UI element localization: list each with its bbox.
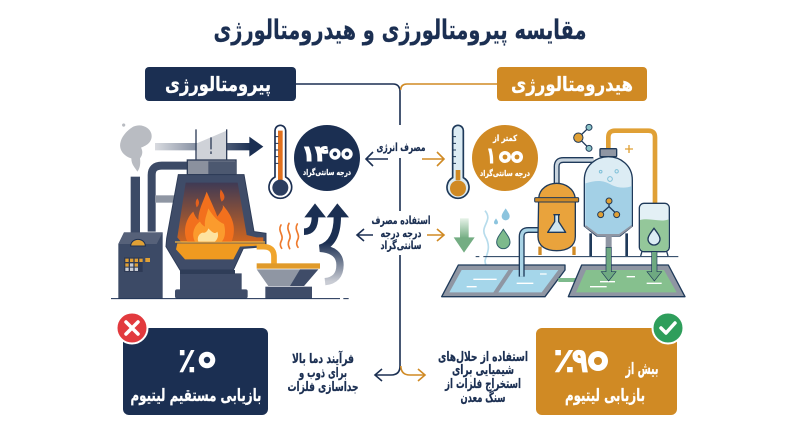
text: hydro description: استخراج فلزات از: [444, 377, 521, 392]
card: 90 percent recovery: بیش از: [625, 359, 658, 378]
arrows: green flow: [601, 247, 662, 281]
heading: pyrometallurgy: [145, 67, 296, 101]
connector lines: [296, 84, 497, 375]
card: 0 percent recovery: ۰: [203, 354, 211, 370]
temperature badge: 100: [472, 125, 538, 191]
text: hydro description: سنگ معدن: [460, 390, 506, 406]
heat waves: [280, 223, 298, 249]
label: temperature use: استفاده مصرف: [372, 214, 430, 227]
card: 90 percent recovery: [536, 312, 684, 415]
card: 0 percent recovery: [116, 312, 268, 415]
steam line: [484, 211, 490, 273]
card: 0 percent recovery: ٪: [178, 341, 196, 381]
vessel: main glass reactor: [584, 149, 632, 256]
heading: hydrometallurgy: هیدرومتالورژی: [511, 72, 633, 96]
furnace window: [177, 183, 263, 243]
illustration: furnace: [111, 123, 349, 299]
icons: drops: [494, 208, 510, 249]
illustration: hydrometallurgy plant: [442, 124, 685, 297]
arrow: green down: [454, 218, 475, 253]
card: 90 percent recovery: ۰: [594, 355, 602, 371]
ladle: [257, 263, 320, 298]
arrows: energy use: [366, 152, 444, 166]
pipe: vessel link: [557, 160, 593, 185]
text: pyro description: جداسازی فلزات: [288, 380, 358, 395]
text: pyro description: [288, 350, 358, 395]
temperature badge: 100: ۰۰: [505, 151, 517, 165]
molten spout: [257, 247, 274, 265]
temperature badge: 100: ۱: [486, 144, 496, 169]
furnace base: [175, 270, 248, 298]
text: pyro description: برای ذوب و: [298, 366, 347, 381]
temperature badge: 1400: ۰۰: [335, 149, 347, 163]
heading: pyrometallurgy: پیرومتالورژی: [165, 72, 271, 97]
text: hydro description: [438, 350, 528, 406]
icon: red cross: [116, 312, 148, 344]
card: 90 percent recovery: بازیابی لیتیوم: [565, 386, 645, 406]
pipe to furnace: [152, 166, 188, 232]
title: مقایسه پیرومتالورژی و هیدرومتالورژی: [214, 15, 586, 46]
icon: thermometer hot: [269, 125, 292, 198]
icon: flames: [185, 189, 234, 242]
vessel: orange reactor: [535, 183, 579, 255]
icon: molecule: [574, 124, 592, 151]
text: pyro description: فرآیند دما بالا: [292, 350, 354, 367]
molten bath: [176, 243, 265, 259]
temperature badge: 1400: ۱۴: [302, 142, 328, 167]
control box: [118, 232, 163, 298]
chimney: [131, 177, 140, 233]
arrows: temperature use: [357, 229, 444, 241]
ground line: [476, 255, 678, 258]
arrow: heat flow: [155, 137, 263, 157]
label: energy use: مصرف انرژی: [376, 141, 426, 154]
furnace cap: [187, 160, 236, 175]
temperature badge: 100: درجه سانتی‌گراد: [480, 168, 530, 178]
furnace body: [166, 175, 266, 270]
text: hydro description: شیمیایی برای: [452, 363, 514, 378]
icon: thermometer cool: [447, 125, 469, 198]
connector pipe: [558, 278, 577, 282]
label: temperature use: [372, 214, 430, 252]
text: hydro description: استفاده از حلال‌های: [438, 350, 528, 365]
pipe: orange: [608, 131, 655, 203]
label: temperature use: سانتی‌گراد: [380, 239, 422, 252]
arrows: rising heat: [304, 203, 349, 282]
tank: blue basin: [442, 265, 565, 297]
ground line: [111, 297, 349, 300]
card: 90 percent recovery: ٪: [553, 341, 575, 381]
pipe: water feed: [522, 230, 538, 277]
temperature badge: 1400: [294, 125, 360, 191]
vessel: green tank: [639, 203, 669, 256]
icon: plus: [625, 145, 633, 153]
icon: smoke cloud: [120, 123, 152, 172]
card: 90 percent recovery: ۹: [572, 341, 588, 381]
heading: hydrometallurgy: [497, 67, 647, 101]
card: 0 percent recovery: بازیابی مستقیم لیتیوم: [130, 386, 262, 406]
temperature badge: 100: کمتر از: [492, 134, 517, 144]
label: temperature use: درجه درجه: [380, 227, 422, 240]
icon: green check: [652, 312, 684, 344]
temperature badge: 1400: درجه سانتی‌گراد: [303, 167, 351, 177]
arrow: pyro small: [375, 369, 382, 381]
arrow: hydro small: [418, 369, 425, 381]
chute: [196, 129, 227, 160]
tank: green basin: [568, 265, 685, 297]
